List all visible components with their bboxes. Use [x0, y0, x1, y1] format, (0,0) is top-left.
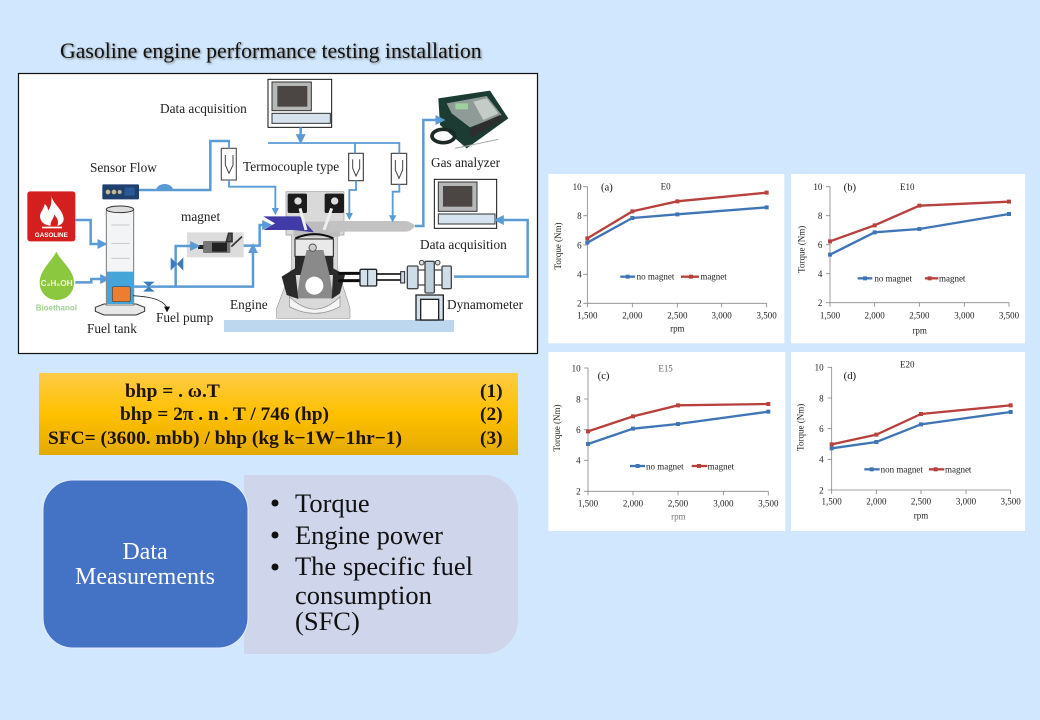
chart: E20 torque: 3,000 [956, 497, 977, 507]
chart: E10 torque: 1,500 [820, 310, 841, 320]
chart: E15 torque [548, 352, 785, 531]
panel: engine test installation diagram [18, 74, 538, 354]
diagram labels: Termocouple type [243, 159, 339, 174]
chart: E10 torque: 8 [818, 211, 823, 221]
chart: E15 torque: rpm [671, 512, 686, 522]
icon: magnet [187, 232, 244, 257]
title: Gasoline engine performance testing installation [60, 39, 482, 63]
chart: E15 torque: 10 [572, 363, 581, 373]
chart: E0 torque: 3,500 [757, 310, 777, 320]
chart: E10 torque: rpm [912, 325, 927, 335]
chart: E0 torque: Torque (Nm) [553, 222, 563, 270]
chart: E15 torque: 1,500 [578, 498, 599, 508]
chart: E10 torque: (b) [844, 183, 857, 194]
icon: bioethanol: Bioethanol [36, 304, 77, 313]
chart: E0 torque: 8 [577, 211, 582, 221]
icon: data acquisition top [268, 79, 332, 127]
chart: E20 torque: magnet [945, 464, 972, 474]
chart: E20 torque: (d) [844, 371, 857, 382]
diagram labels [87, 101, 524, 336]
chart: E15 torque: E15 [658, 363, 673, 373]
chart: E15 torque: (c) [598, 371, 610, 382]
chart: E20 torque: non magnet [881, 464, 923, 474]
chart: E15 torque: 6 [576, 425, 581, 435]
chart: E0 torque: 2,000 [622, 310, 643, 320]
icon: fuel tank [95, 206, 170, 315]
chart: E15 torque: 2 [576, 487, 581, 497]
icon: bioethanol: C₂H₅OH [41, 278, 73, 288]
chart: E10 torque: 3,000 [954, 310, 975, 320]
panel: measured parameters list [244, 475, 518, 654]
panel: formulas: (2) [480, 404, 503, 425]
panel: formulas: (1) [480, 381, 503, 402]
chart: E0 torque: 10 [573, 182, 582, 192]
chart: E20 torque: 2,000 [866, 497, 887, 507]
chart: E0 torque: 4 [577, 270, 582, 280]
chart: E0 torque: E0 [661, 181, 671, 191]
chart: E10 torque: 2 [818, 298, 822, 308]
chart: E15 torque: no magnet [646, 461, 684, 471]
panel: data measurements: Data [122, 539, 168, 565]
chart: E20 torque: 8 [819, 393, 824, 403]
icon: valves [143, 257, 183, 292]
chart: E20 torque: 4 [819, 455, 824, 465]
chart: E0 torque: 6 [577, 240, 582, 250]
panel: formulas: SFC= (3600. mbb) / bhp (kg k−1W−1hr−1) [48, 428, 402, 449]
panel: measured parameters list: (SFC) [295, 606, 360, 636]
diagram labels: Gas analyzer [431, 155, 501, 170]
chart: E15 torque: 2,000 [623, 498, 644, 508]
base platform [224, 320, 454, 332]
chart: E10 torque: 6 [818, 240, 823, 250]
chart: E20 torque: 2,500 [911, 497, 932, 507]
chart: E10 torque: no magnet [874, 274, 913, 284]
chart: E15 torque: Torque (Nm) [552, 404, 562, 452]
chart: E20 torque: 3,500 [1001, 497, 1021, 507]
chart: E0 torque: (a) [601, 183, 613, 194]
panel: measured parameters list: consumption [295, 580, 432, 610]
diagram labels: magnet [181, 209, 220, 224]
chart: E15 torque: 8 [576, 394, 581, 404]
diagram labels: Fuel tank [87, 321, 137, 336]
chart: E20 torque: 2 [819, 485, 824, 495]
chart: E20 torque: 1,500 [822, 497, 842, 507]
icon: flow sensor [102, 184, 139, 199]
chart: E20 torque: E20 [900, 359, 915, 369]
chart: E0 torque: 2 [577, 299, 582, 309]
panel: data measurements: Measurements [75, 564, 215, 590]
panel: formulas [39, 373, 518, 455]
chart: E10 torque: 2,500 [909, 310, 930, 320]
chart: E0 torque: 3,000 [712, 310, 732, 320]
icon: gasoline [27, 191, 75, 241]
chart: E20 torque: 10 [815, 363, 824, 373]
chart: E10 torque: 10 [813, 182, 823, 192]
diagram labels: Data acquisition [160, 101, 247, 116]
chart: E10 torque: E10 [900, 182, 915, 192]
diagram labels: Engine [230, 297, 268, 312]
chart: E10 torque: magnet [939, 274, 966, 284]
panel: formulas: bhp = . ω.T [125, 381, 220, 402]
chart: E20 torque: Torque (Nm) [795, 404, 805, 451]
icon: bioethanol [36, 252, 77, 313]
chart: E10 torque: 3,500 [999, 310, 1020, 320]
chart: E0 torque: magnet [700, 272, 727, 282]
panel: data measurements [43, 480, 248, 648]
diagram labels: Dynamometer [447, 297, 524, 312]
chart: E10 torque [791, 174, 1025, 343]
icon: engine [263, 192, 415, 318]
chart: E20 torque [791, 352, 1025, 531]
panel: measured parameters list: The specific fuel [295, 551, 473, 581]
panel: measured parameters list: Engine power [295, 520, 443, 550]
chart: E20 torque: rpm [914, 511, 928, 521]
chart: E0 torque [548, 174, 784, 343]
chart: E10 torque: Torque (Nm) [796, 226, 806, 273]
chart: E0 torque: rpm [670, 324, 685, 334]
chart: E15 torque: 2,500 [668, 498, 689, 508]
diagram labels: Sensor Flow [90, 160, 157, 175]
icon: gasoline: GASOLINE [35, 232, 68, 239]
chart: E15 torque: 4 [576, 456, 581, 466]
panel: formulas: bhp = 2π . n . T / 746 (hp) [120, 404, 329, 425]
chart: E0 torque: no magnet [637, 272, 675, 282]
chart: E10 torque: 4 [818, 269, 823, 279]
icon: data acquisition right [434, 179, 497, 228]
chart: E20 torque: 6 [819, 424, 824, 434]
icon: gas analyzer [432, 91, 508, 148]
diagram labels: Data acquisition [420, 237, 507, 252]
piping network [75, 120, 528, 287]
chart: E15 torque: magnet [708, 461, 735, 471]
chart: E15 torque: 3,500 [758, 498, 779, 508]
chart: E15 torque: 3,000 [713, 498, 734, 508]
icon: thermocouples [221, 148, 407, 184]
chart: E10 torque: 2,000 [865, 310, 885, 320]
diagram labels: Fuel pump [156, 310, 214, 325]
panel: measured parameters list: Torque [295, 488, 370, 518]
chart: E0 torque: 1,500 [577, 310, 598, 320]
panel: formulas: (3) [480, 428, 503, 449]
icon: dynamometer [338, 260, 451, 320]
chart: E0 torque: 2,500 [667, 310, 688, 320]
